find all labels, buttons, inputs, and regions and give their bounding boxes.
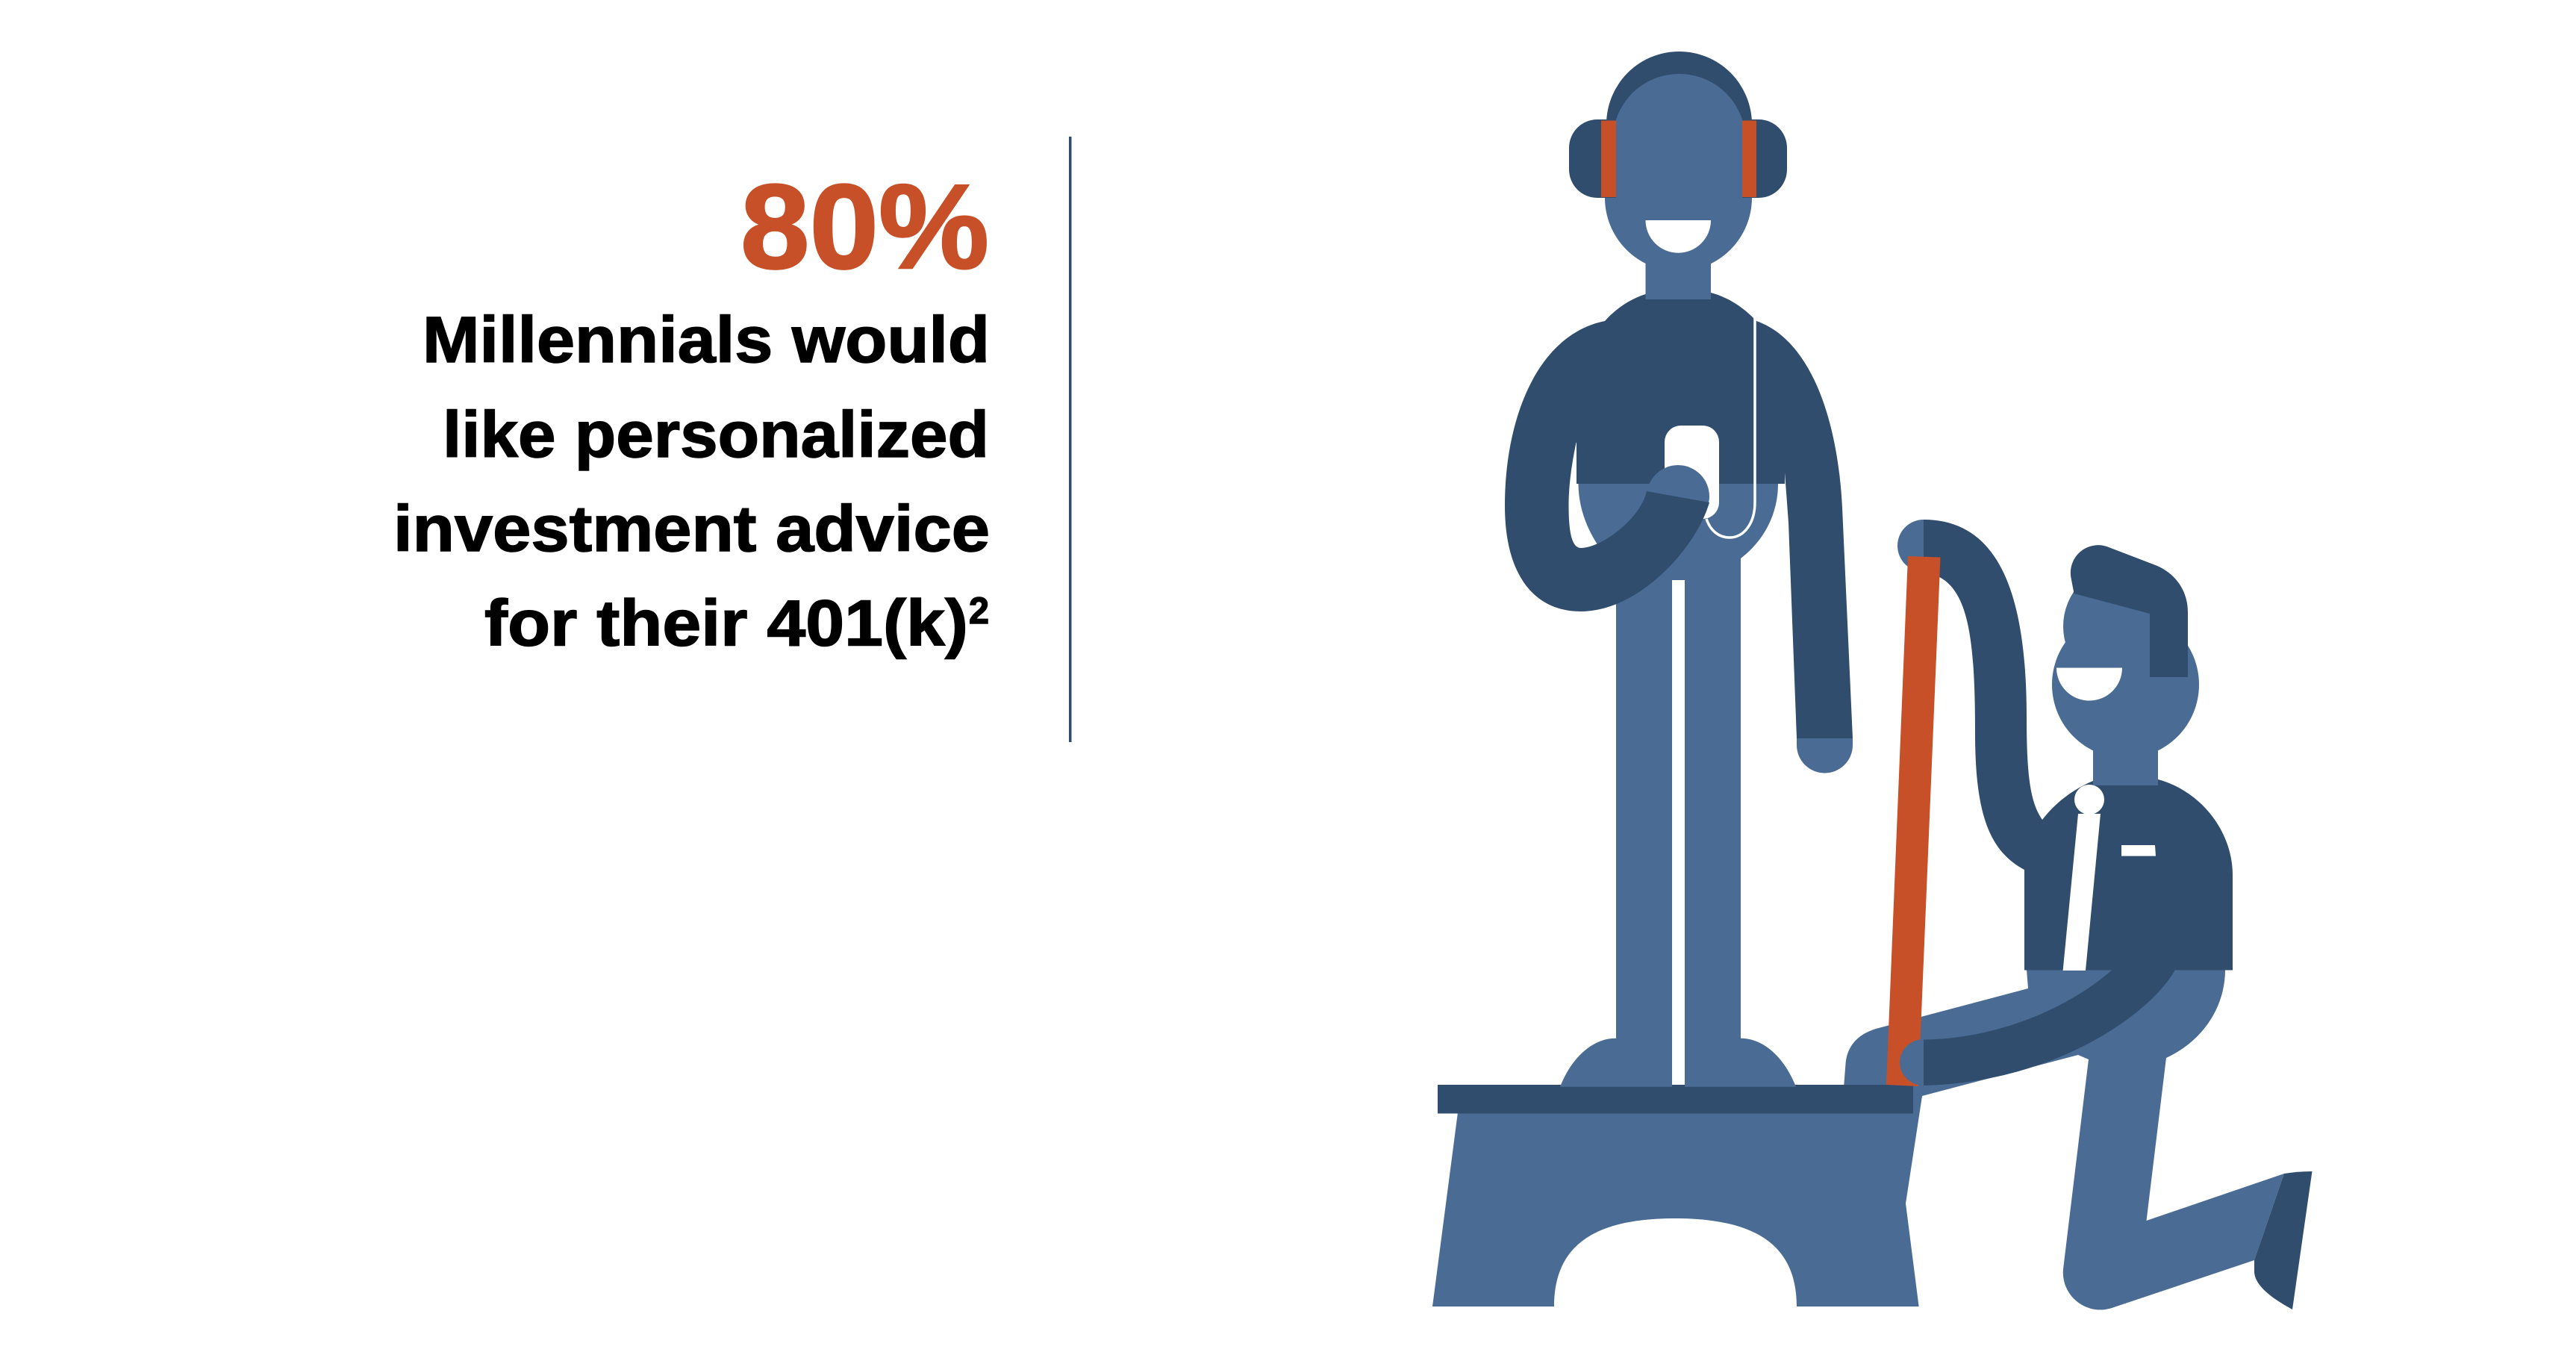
standing man xyxy=(1505,52,1853,1087)
raised arm sleeve xyxy=(1924,520,2060,870)
neck xyxy=(2093,739,2158,785)
stool top xyxy=(1438,1085,1913,1114)
heading: 80%: 80% xyxy=(740,160,989,294)
right ear pad xyxy=(1742,121,1756,197)
description text: Millennials would xyxy=(422,304,990,376)
headphones left cup xyxy=(1569,119,1644,198)
description text: investment advice xyxy=(393,493,990,565)
upper head xyxy=(2063,564,2187,688)
left arm sleeve xyxy=(1505,321,1709,611)
left hand xyxy=(1647,465,1709,528)
orange stick xyxy=(1886,556,1941,1086)
illustration: kneeling man, stool and standing man xyxy=(1432,52,2313,1309)
pelvis xyxy=(1578,484,1778,580)
collar xyxy=(2074,785,2104,815)
left ear pad xyxy=(1601,121,1616,197)
raised hand xyxy=(1897,520,1950,572)
torso xyxy=(1577,293,1756,484)
smile xyxy=(1645,220,1711,253)
pocket xyxy=(2121,845,2156,856)
headphones band xyxy=(1606,52,1752,124)
kneeling man legs xyxy=(1843,970,2284,1309)
description text: 2 xyxy=(969,590,989,632)
head xyxy=(2052,611,2199,759)
torso xyxy=(2024,779,2233,971)
knee hand xyxy=(1900,1039,1947,1086)
stool body xyxy=(1432,1086,1923,1307)
kneeling man upper body xyxy=(1886,520,2233,1086)
headphones right cup xyxy=(1712,119,1787,198)
lower arm sleeve xyxy=(1924,970,2175,1086)
right arm sleeve xyxy=(1755,321,1853,738)
description text: like personalized xyxy=(443,399,989,471)
vertical divider xyxy=(1069,137,1072,742)
smile xyxy=(2056,667,2122,700)
description text: for their 401(k) xyxy=(484,587,968,660)
phone xyxy=(1665,426,1719,519)
kneeling man shoe xyxy=(2254,1171,2313,1309)
head xyxy=(1605,74,1752,271)
right hand xyxy=(1797,738,1853,773)
tie xyxy=(2063,814,2101,971)
legs and feet xyxy=(1560,523,1796,1087)
stool xyxy=(1432,1085,1923,1307)
statistic text block xyxy=(393,160,990,660)
earphone wire xyxy=(1706,318,1755,538)
neck xyxy=(1645,254,1711,299)
description text xyxy=(393,304,990,660)
hair xyxy=(2071,545,2188,677)
